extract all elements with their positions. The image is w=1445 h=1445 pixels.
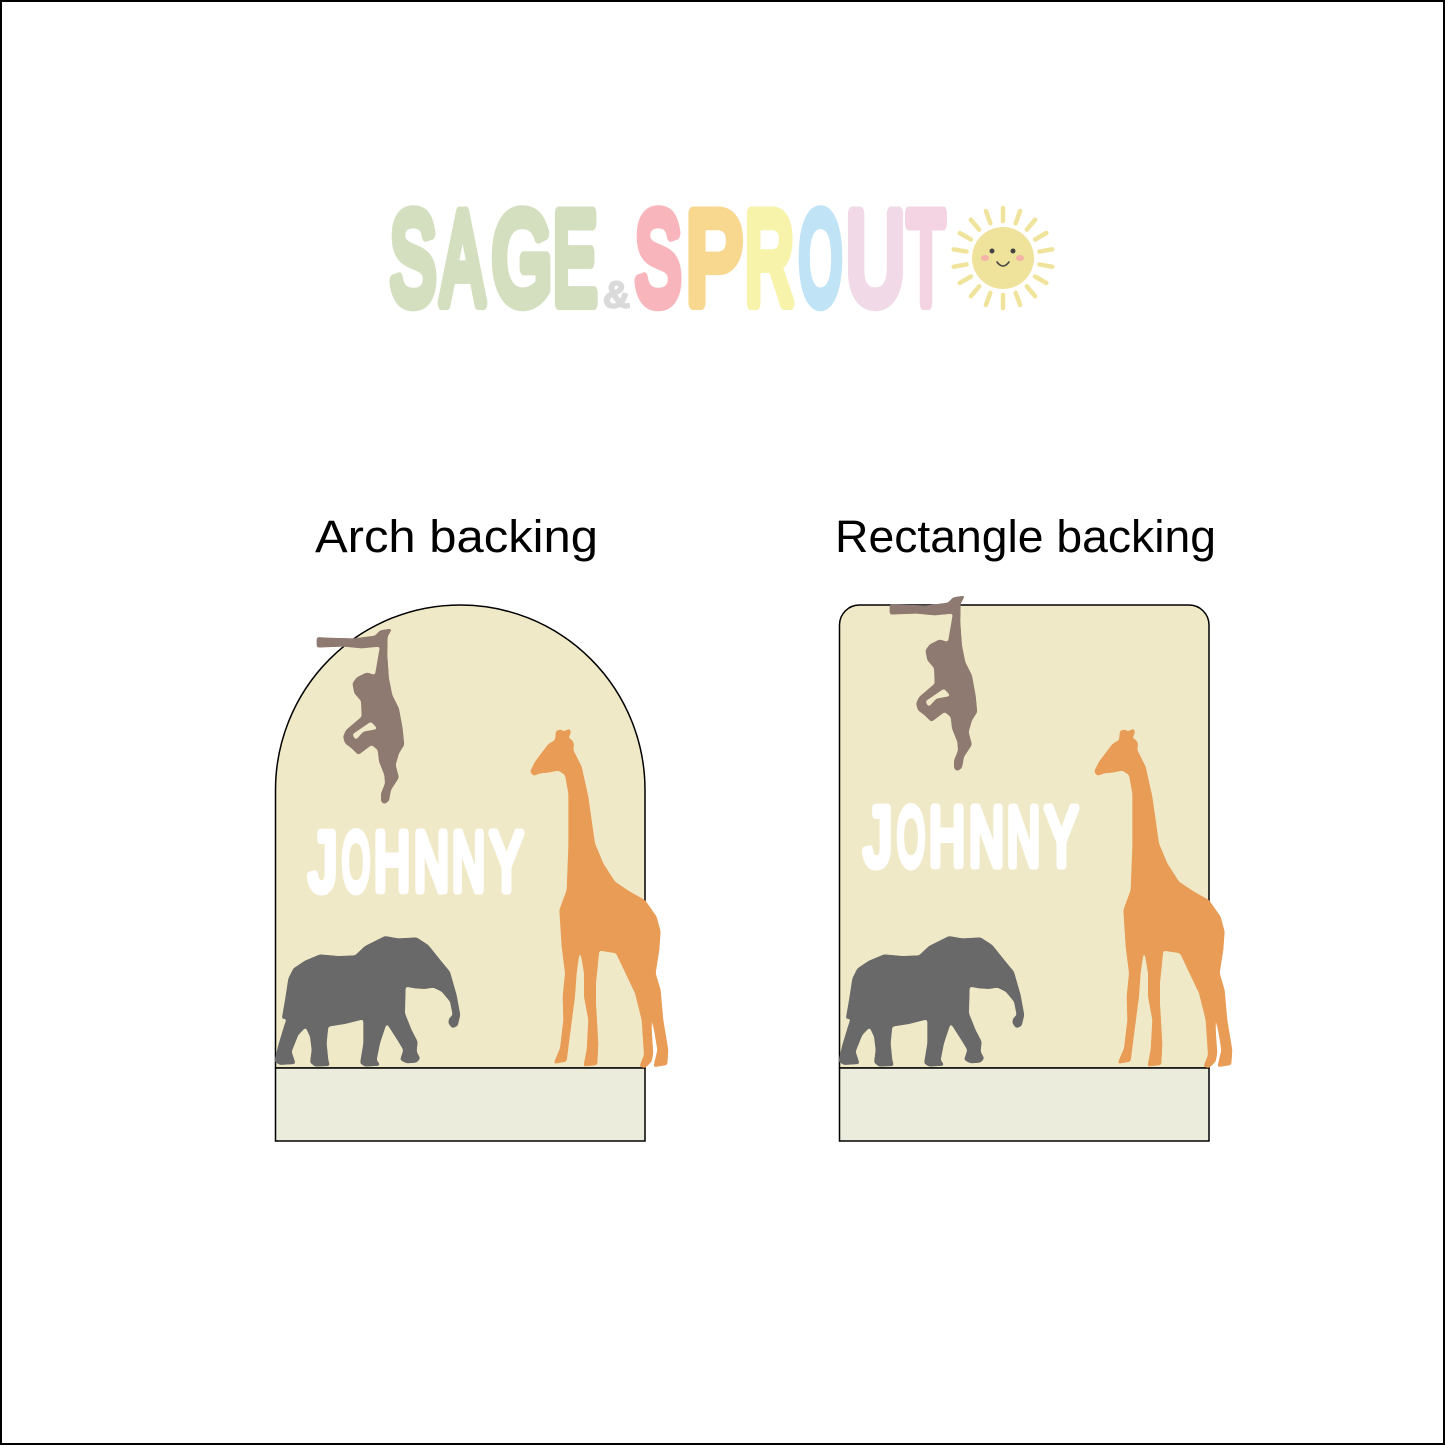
- name: JOHNNY: [309, 815, 523, 908]
- name: JOHNNY: H: [374, 815, 410, 908]
- name: JOHNNY: N: [414, 815, 449, 908]
- icon: giraffe: [530, 728, 668, 1068]
- name: JOHNNY: N: [452, 815, 485, 908]
- name: JOHNNY: O: [342, 815, 370, 908]
- logo wordmark: SPROUT: [635, 185, 945, 331]
- name: JOHNNY: O: [897, 790, 925, 883]
- panel: arch backing sign: [274, 605, 668, 1141]
- name: JOHNNY: [864, 790, 1078, 883]
- logo wordmark: SAGE: S: [390, 185, 436, 331]
- logo wordmark: SAGE: A: [441, 185, 484, 331]
- logo wordmark: SPROUT: O: [799, 185, 842, 331]
- arch backing shape: [276, 605, 645, 1068]
- icon: hanging monkey on branch: [890, 595, 977, 771]
- logo wordmark: SAGE: E: [553, 185, 597, 331]
- heading: Arch backing: Arch backing: [315, 511, 598, 562]
- panel: rectangle backing sign: [838, 595, 1232, 1141]
- logo wordmark: SPROUT: U: [846, 185, 905, 331]
- name: JOHNNY: J: [864, 790, 892, 883]
- name: JOHNNY: J: [309, 815, 337, 908]
- name: JOHNNY: N: [1007, 790, 1040, 883]
- name: JOHNNY: H: [929, 790, 965, 883]
- name: JOHNNY: Y: [1045, 790, 1078, 883]
- arch base stand: [276, 1068, 645, 1141]
- rectangle base stand: [840, 1068, 1209, 1141]
- logo wordmark: SPROUT: R: [745, 185, 794, 331]
- logo ampersand: &: [604, 274, 629, 315]
- logo wordmark: SPROUT: P: [686, 185, 743, 331]
- logo: Sage & Sprout: T: [907, 185, 945, 331]
- icon: smiling sun: [954, 208, 1052, 308]
- name: JOHNNY: N: [969, 790, 1004, 883]
- logo: Sage & Sprout: [390, 185, 1052, 331]
- icon: hanging monkey on branch: [317, 628, 404, 804]
- icon: giraffe: [1094, 728, 1232, 1068]
- icon: elephant: [838, 936, 1024, 1067]
- logo wordmark: SPROUT: S: [635, 185, 681, 331]
- rectangle backing shape: [840, 605, 1209, 1068]
- logo wordmark: SAGE: [390, 185, 597, 331]
- logo wordmark: SAGE: G: [492, 185, 552, 331]
- heading: Rectangle backing: Rectangle backing: [835, 511, 1216, 562]
- name: JOHNNY: Y: [490, 815, 523, 908]
- icon: elephant: [274, 936, 460, 1067]
